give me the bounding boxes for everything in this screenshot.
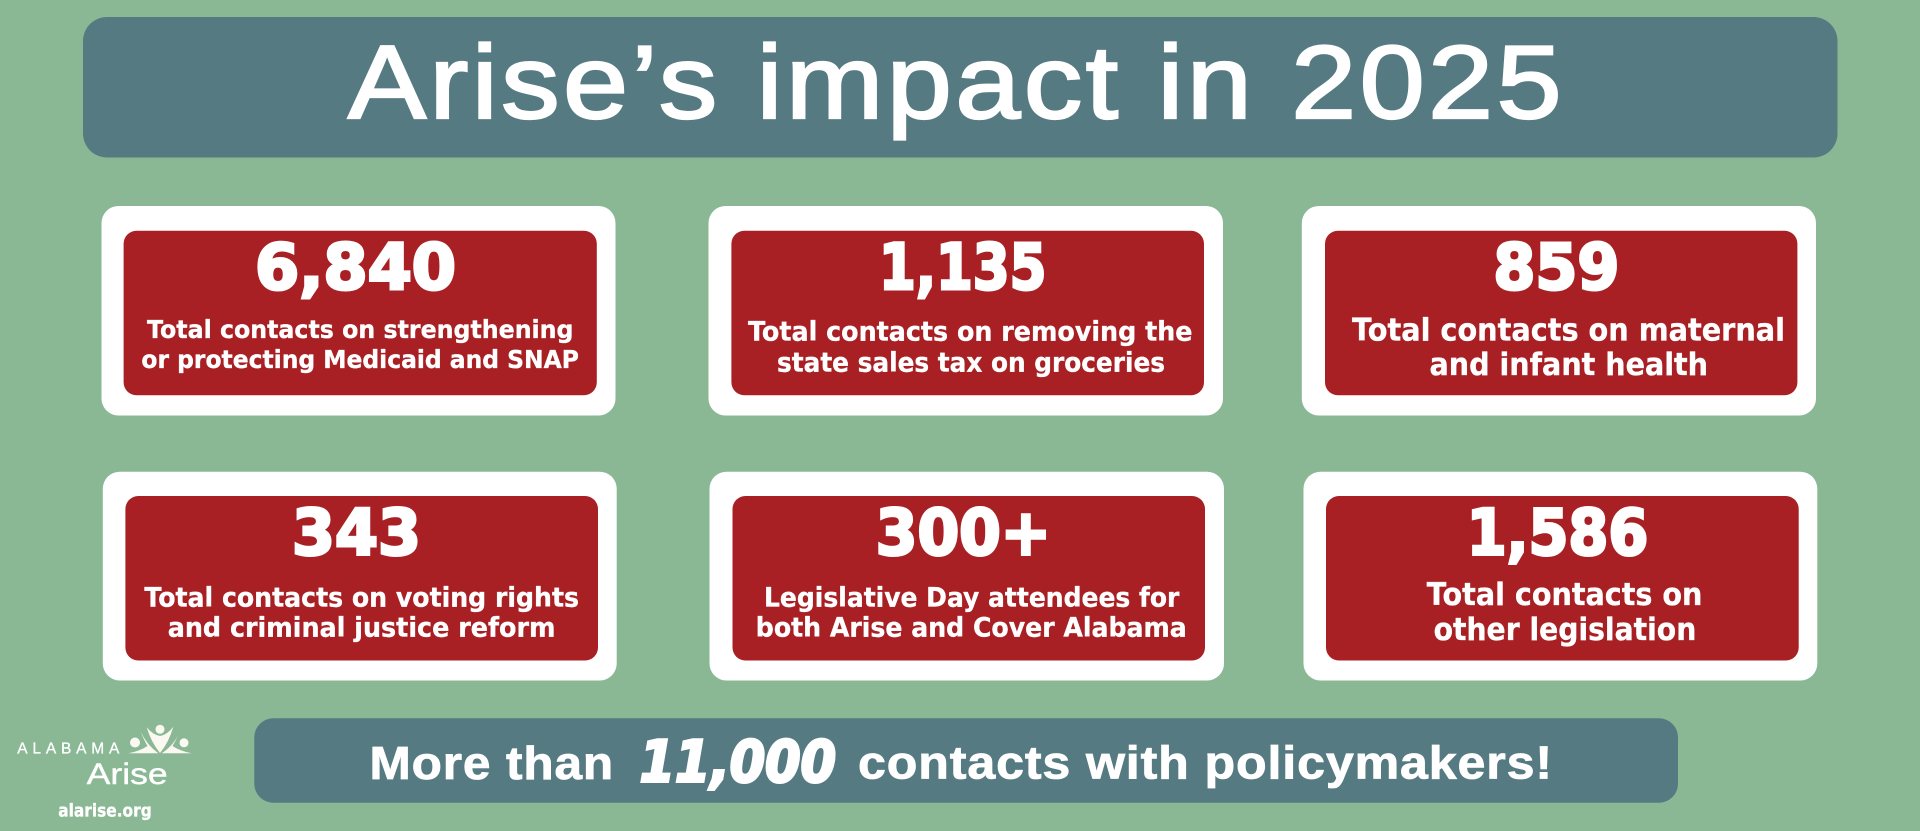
- panel: other legislation contacts: other legislation: [1434, 612, 1696, 648]
- panel: grocery tax contacts: [708, 206, 1223, 416]
- title banner: [83, 17, 1838, 158]
- bottom banner: contacts with policymakers!: [858, 736, 1553, 788]
- panel: maternal and infant health contacts: Total contacts on maternal: [1352, 313, 1785, 349]
- panel: other legislation contacts: [1304, 472, 1817, 680]
- icon: three raised-arm figures: [128, 725, 192, 753]
- panel: Medicaid and SNAP contacts: [102, 206, 616, 416]
- panel: voting rights contacts: Total contacts on voting rights: [144, 583, 579, 614]
- panel: Legislative Day attendees: [710, 472, 1224, 680]
- panel: Medicaid and SNAP contacts: or protecting Medicaid and SNAP: [141, 345, 579, 374]
- panel: maternal and infant health contacts: 859: [1493, 231, 1619, 304]
- logo: Alabama Arise: [17, 725, 192, 822]
- bottom banner: More than: [370, 737, 614, 789]
- logo: Alabama Arise: Arise: [87, 758, 168, 791]
- website: alarise.org: [58, 802, 152, 822]
- panel: grocery tax contacts: Total contacts on removing the: [748, 317, 1192, 348]
- panel: voting rights contacts: 343: [292, 497, 421, 570]
- panel: other legislation contacts: 1,586: [1467, 497, 1648, 570]
- panel: maternal and infant health contacts: [1302, 206, 1816, 416]
- panel: Medicaid and SNAP contacts: Total contacts on strengthening: [147, 315, 574, 344]
- panel: maternal and infant health contacts: and infant health: [1430, 347, 1708, 383]
- panel: voting rights contacts: and criminal justice reform: [168, 613, 555, 644]
- panel: Legislative Day attendees: both Arise and Cover Alabama: [756, 613, 1187, 644]
- title: Arise’s impact in 2025: [348, 25, 1565, 141]
- panel: Medicaid and SNAP contacts: 6,840: [255, 231, 456, 304]
- panel: grocery tax contacts: state sales tax on groceries: [777, 348, 1165, 379]
- panel: Legislative Day attendees: Legislative Day attendees for: [764, 583, 1180, 614]
- panel: Legislative Day attendees: 300+: [876, 497, 1051, 570]
- bottom banner: [254, 718, 1678, 803]
- logo: Alabama Arise: ALABAMA: [17, 740, 120, 757]
- panel: voting rights contacts: [103, 472, 617, 680]
- panel: grocery tax contacts: 1,135: [879, 231, 1046, 304]
- total contacts figure: 11,000: [640, 730, 836, 796]
- panel: other legislation contacts: Total contacts on: [1427, 577, 1702, 613]
